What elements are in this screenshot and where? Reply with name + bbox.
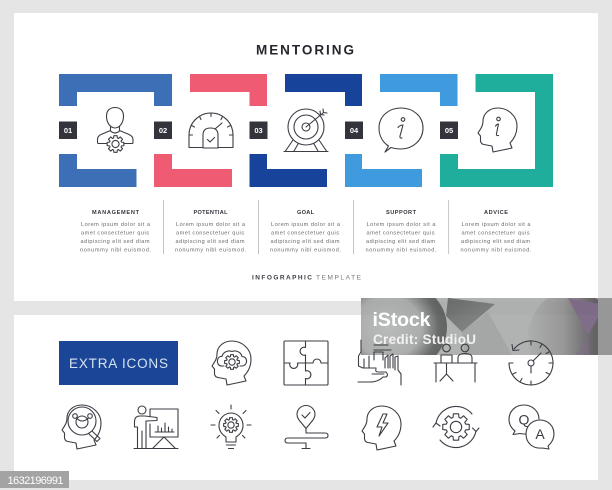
column: potential: nonummy nibl euismod. (175, 248, 246, 254)
column: goal: adipiscing elit sed diam (270, 239, 340, 245)
column: advice: Lorem ipsum dolor sit a (462, 222, 531, 228)
panel: mentoring infographic (14, 13, 598, 301)
column: advice (460, 210, 532, 254)
extra icons label: EXTRA ICONS (69, 356, 168, 371)
column: management: Lorem ipsum dolor sit a (81, 222, 151, 228)
icon: presenter with board (134, 406, 178, 448)
column: support: nonummy nibl euismod. (366, 248, 437, 254)
column: goal: GOAL (297, 210, 315, 216)
column: goal: amet consectetuer quis (271, 230, 339, 236)
number badge 05 (440, 122, 458, 139)
icon: gear with cycle arrows (433, 406, 479, 448)
icon: puzzle (284, 341, 328, 385)
column: management: amet consectetuer quis (81, 230, 149, 236)
step 02 bracket: coral (154, 74, 267, 187)
icon: head with magnifier and network (62, 405, 101, 449)
column: support: amet consectetuer quis (366, 230, 435, 236)
number badge 01: 01 (64, 126, 72, 135)
panel: extra icons (14, 315, 598, 480)
watermark text: iStock (372, 309, 431, 331)
number badge 03 (250, 122, 268, 139)
step 05 bracket: teal (440, 74, 553, 187)
column: potential: Lorem ipsum dolor sit a (176, 222, 246, 228)
step 03 bracket: navy (250, 74, 362, 187)
footer caption: INFOGRAPHIC (252, 274, 312, 282)
column: goal (270, 210, 341, 254)
column: potential: amet consectetuer quis (176, 230, 244, 236)
column: potential (175, 210, 246, 254)
footer caption (252, 274, 362, 282)
column: management: nonummy nibl euismod. (80, 248, 151, 254)
number badge 01 (59, 122, 77, 139)
column: advice: nonummy nibl euismod. (460, 248, 532, 254)
image id tag: 1632196991 (8, 475, 64, 487)
column: support (366, 210, 437, 254)
step 04 bracket: light blue (345, 74, 458, 187)
column: potential: adipiscing elit sed diam (176, 239, 245, 245)
icon: questions and answers bubbles: A (535, 426, 545, 442)
number badge 02: 02 (159, 126, 167, 135)
column: goal: nonummy nibl euismod. (270, 248, 341, 254)
column: potential: POTENTIAL (194, 210, 228, 216)
column: support: Lorem ipsum dolor sit a (366, 222, 436, 228)
icon: route with location pin (285, 406, 328, 448)
title: MENTORING (256, 42, 354, 58)
icon: target with arrow (284, 109, 328, 152)
column: advice: ADVICE (484, 210, 508, 216)
column: management (80, 210, 151, 254)
column: management: adipiscing elit sed diam (80, 239, 150, 245)
column: advice: amet consectetuer quis (462, 230, 530, 236)
icon: speech bubble with info (379, 108, 423, 152)
icon: manager with gear (98, 108, 133, 152)
number badge 05: 05 (445, 126, 453, 135)
icon: head with cloud and gear (212, 341, 251, 385)
icon: clock with arrow (509, 341, 553, 385)
number badge 04 (345, 122, 363, 139)
column: advice: adipiscing elit sed diam (461, 239, 530, 245)
icon: gauge with check (189, 113, 233, 148)
extra icons label (59, 341, 178, 385)
number badge 02 (154, 122, 172, 139)
number badge 03: 03 (254, 126, 263, 135)
stock watermark banner (361, 298, 612, 355)
image id tag (0, 471, 69, 488)
number badge 04: 04 (350, 126, 359, 135)
icon: questions and answers bubbles: Q (519, 412, 530, 428)
column: support: SUPPORT (386, 210, 417, 216)
icon: head with lightning (362, 406, 401, 450)
step 01 bracket: blue (59, 74, 172, 187)
footer caption: TEMPLATE (316, 274, 362, 282)
column: goal: Lorem ipsum dolor sit a (271, 222, 341, 228)
column: support: adipiscing elit sed diam (366, 239, 435, 245)
icon: questions and answers bubbles (509, 405, 554, 449)
icon: light bulb with gear (211, 405, 251, 448)
column: management: MANAGEMENT (92, 210, 140, 216)
stock watermark banner: Credit: StudioU (373, 332, 476, 347)
icon: mentoring at desk (434, 344, 477, 382)
icon: head with info (478, 108, 517, 152)
icon: joined hands (358, 340, 401, 385)
